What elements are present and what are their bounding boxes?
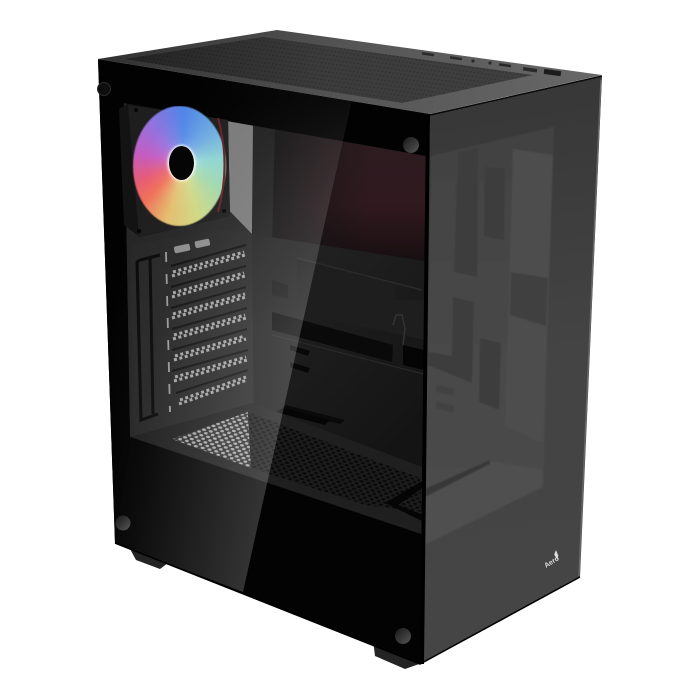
top panel bbox=[98, 30, 602, 115]
standoff top right bbox=[403, 137, 419, 153]
case interior bbox=[120, 95, 430, 540]
top mesh bbox=[125, 37, 533, 103]
top front I/O buttons bbox=[422, 52, 561, 76]
logo: Aero bbox=[543, 555, 561, 570]
standoff top left bbox=[98, 82, 110, 96]
cable cutout square bbox=[272, 280, 286, 288]
left foot bbox=[129, 547, 168, 569]
vertical duct bbox=[253, 126, 274, 237]
front lower shroud bbox=[115, 437, 424, 664]
fan frame bbox=[119, 104, 230, 237]
expansion bracket bbox=[137, 255, 160, 420]
fan hub bbox=[168, 145, 196, 181]
bottom edge bbox=[115, 543, 580, 664]
logo bbox=[541, 550, 562, 570]
standoff bottom right bbox=[395, 628, 411, 644]
fan rgb ring bbox=[132, 106, 227, 228]
grey vent panel bbox=[228, 121, 253, 234]
rear panel bbox=[122, 100, 254, 437]
right edge highlight bbox=[579, 80, 601, 576]
upper rear wall with pink glow bbox=[256, 126, 426, 246]
right foot bbox=[373, 640, 422, 669]
fan bbox=[119, 104, 230, 237]
front/side corner edge bbox=[422, 114, 428, 664]
PCI slot vents bbox=[172, 252, 247, 404]
black left frame bbox=[98, 59, 130, 543]
front glass panel base bbox=[98, 59, 430, 664]
standoff bottom left bbox=[116, 516, 130, 530]
slot pills bbox=[174, 243, 191, 254]
slot dividers bbox=[171, 245, 248, 393]
floor bbox=[132, 407, 422, 534]
reflected motherboard tray bbox=[424, 127, 554, 545]
side glass panel bbox=[420, 76, 602, 664]
glass reflection bbox=[128, 97, 352, 592]
middle motherboard wall bbox=[252, 234, 424, 424]
illustration: PC case bbox=[97, 30, 602, 669]
vertical slot ticks bbox=[166, 252, 170, 412]
cable cutout band bbox=[272, 312, 393, 362]
